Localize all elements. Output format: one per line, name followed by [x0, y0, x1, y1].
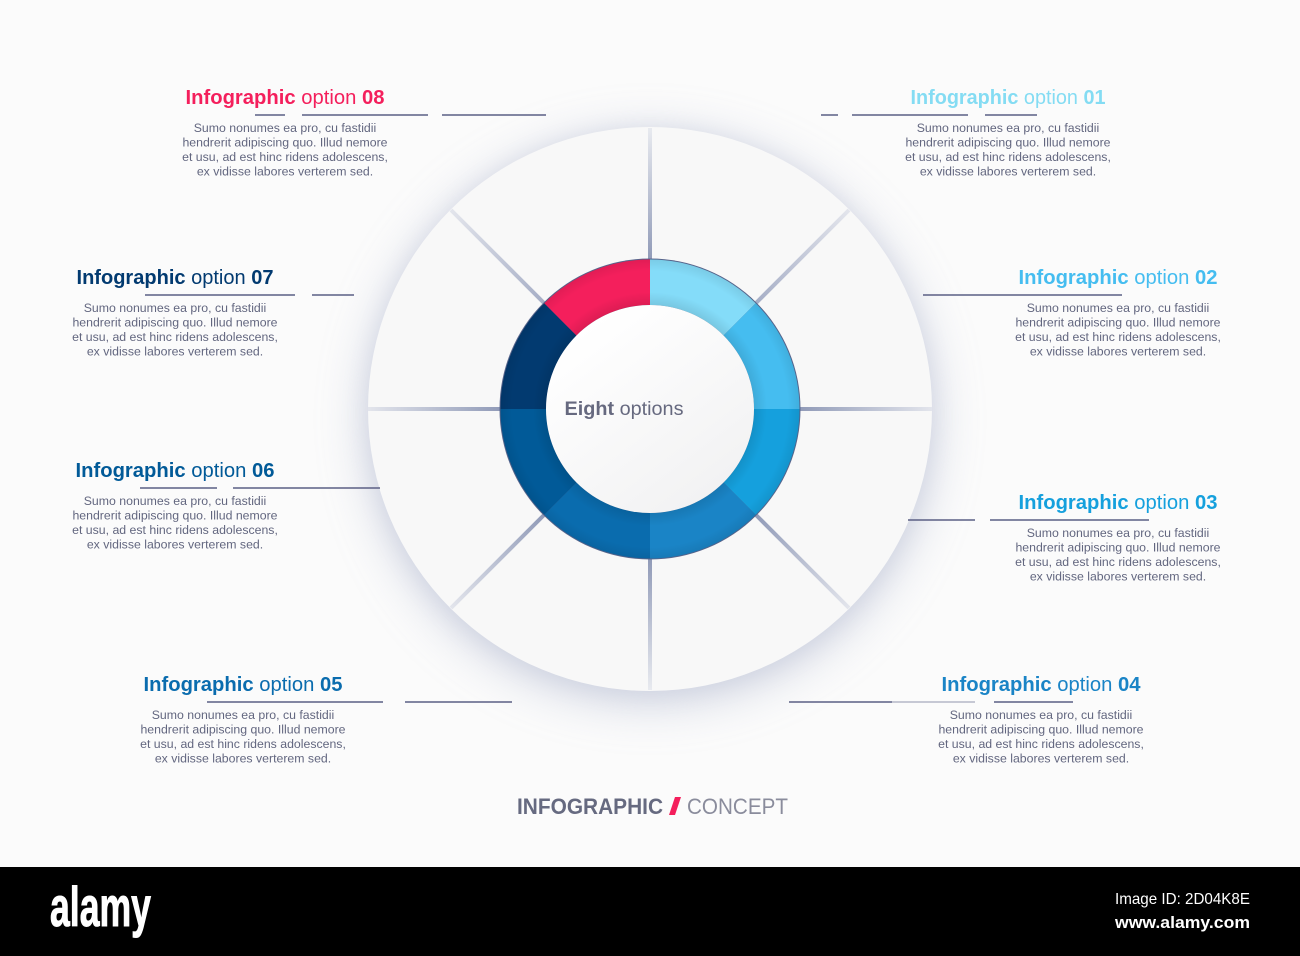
heading 03: Infographic option 03	[1018, 492, 1218, 514]
centre circle	[546, 305, 754, 513]
option 06	[72, 460, 380, 552]
text block 04: et usu, ad est hinc ridens adolescens,	[938, 737, 1144, 751]
image id: Image ID: 2D04K8E	[1115, 891, 1250, 908]
website: www.alamy.com	[1114, 913, 1250, 932]
text block 04: Sumo nonumes ea pro, cu fastidii	[950, 708, 1132, 722]
text block 03: hendrerit adipiscing quo. Illud nemore	[1015, 540, 1221, 554]
option 08	[182, 87, 546, 178]
watermark band	[0, 867, 1300, 956]
panel: pie disc with shadow	[366, 127, 934, 703]
heading 04: Infographic option 04	[942, 674, 1141, 696]
footer title: INFOGRAPHIC	[517, 794, 663, 819]
heading 05: Infographic option 05	[144, 674, 342, 696]
option 04	[789, 674, 1144, 766]
text block 01: Sumo nonumes ea pro, cu fastidii	[917, 121, 1099, 135]
text block 05: ex vidisse labores verterem sed.	[155, 752, 331, 766]
footer title: CONCEPT	[687, 794, 788, 819]
option 02	[923, 267, 1221, 358]
text block 01: hendrerit adipiscing quo. Illud nemore	[905, 136, 1111, 150]
heading 06: Infographic option 06	[76, 460, 274, 482]
donut ring with eight coloured segments	[500, 258, 800, 560]
option 05	[140, 674, 512, 766]
text block 05: et usu, ad est hinc ridens adolescens,	[140, 737, 346, 751]
text block 03: et usu, ad est hinc ridens adolescens,	[1015, 555, 1221, 569]
option 07	[72, 267, 354, 358]
text block 05: hendrerit adipiscing quo. Illud nemore	[140, 722, 346, 736]
text block 03: ex vidisse labores verterem sed.	[1030, 570, 1206, 584]
text block 01: et usu, ad est hinc ridens adolescens,	[905, 150, 1111, 164]
text block 07: Sumo nonumes ea pro, cu fastidii	[84, 301, 266, 315]
text block 02: et usu, ad est hinc ridens adolescens,	[1015, 330, 1221, 344]
text block 02: Sumo nonumes ea pro, cu fastidii	[1027, 301, 1209, 315]
text block 06: et usu, ad est hinc ridens adolescens,	[72, 523, 278, 537]
spokes dividing the eight sectors	[368, 128, 932, 690]
text block 06: hendrerit adipiscing quo. Illud nemore	[72, 508, 278, 522]
heading 02: Infographic option 02	[1018, 267, 1218, 289]
text block 02: ex vidisse labores verterem sed.	[1030, 344, 1206, 358]
text block 07: hendrerit adipiscing quo. Illud nemore	[72, 316, 278, 330]
text block 08: Sumo nonumes ea pro, cu fastidii	[194, 121, 376, 135]
text block 06: Sumo nonumes ea pro, cu fastidii	[84, 494, 266, 508]
text block 05: Sumo nonumes ea pro, cu fastidii	[152, 708, 334, 722]
text block 08: et usu, ad est hinc ridens adolescens,	[182, 150, 388, 164]
text block 03: Sumo nonumes ea pro, cu fastidii	[1027, 526, 1209, 540]
heading 07: Infographic option 07	[76, 267, 274, 289]
text block 02: hendrerit adipiscing quo. Illud nemore	[1015, 316, 1221, 330]
centre label: Eight options	[564, 399, 684, 420]
text block 08: hendrerit adipiscing quo. Illud nemore	[182, 136, 388, 150]
heading 01: Infographic option 01	[910, 87, 1106, 109]
alamy logo: alamy	[50, 875, 151, 938]
text block 06: ex vidisse labores verterem sed.	[87, 538, 263, 552]
text block 07: et usu, ad est hinc ridens adolescens,	[72, 330, 278, 344]
text block 04: ex vidisse labores verterem sed.	[953, 752, 1129, 766]
option 03	[908, 492, 1221, 584]
text block 07: ex vidisse labores verterem sed.	[87, 344, 263, 358]
heading 08: Infographic option 08	[186, 87, 384, 109]
footer title	[517, 794, 788, 819]
option 01	[821, 87, 1111, 178]
text block 08: ex vidisse labores verterem sed.	[197, 164, 373, 178]
text block 04: hendrerit adipiscing quo. Illud nemore	[938, 722, 1144, 736]
text block 01: ex vidisse labores verterem sed.	[920, 164, 1096, 178]
